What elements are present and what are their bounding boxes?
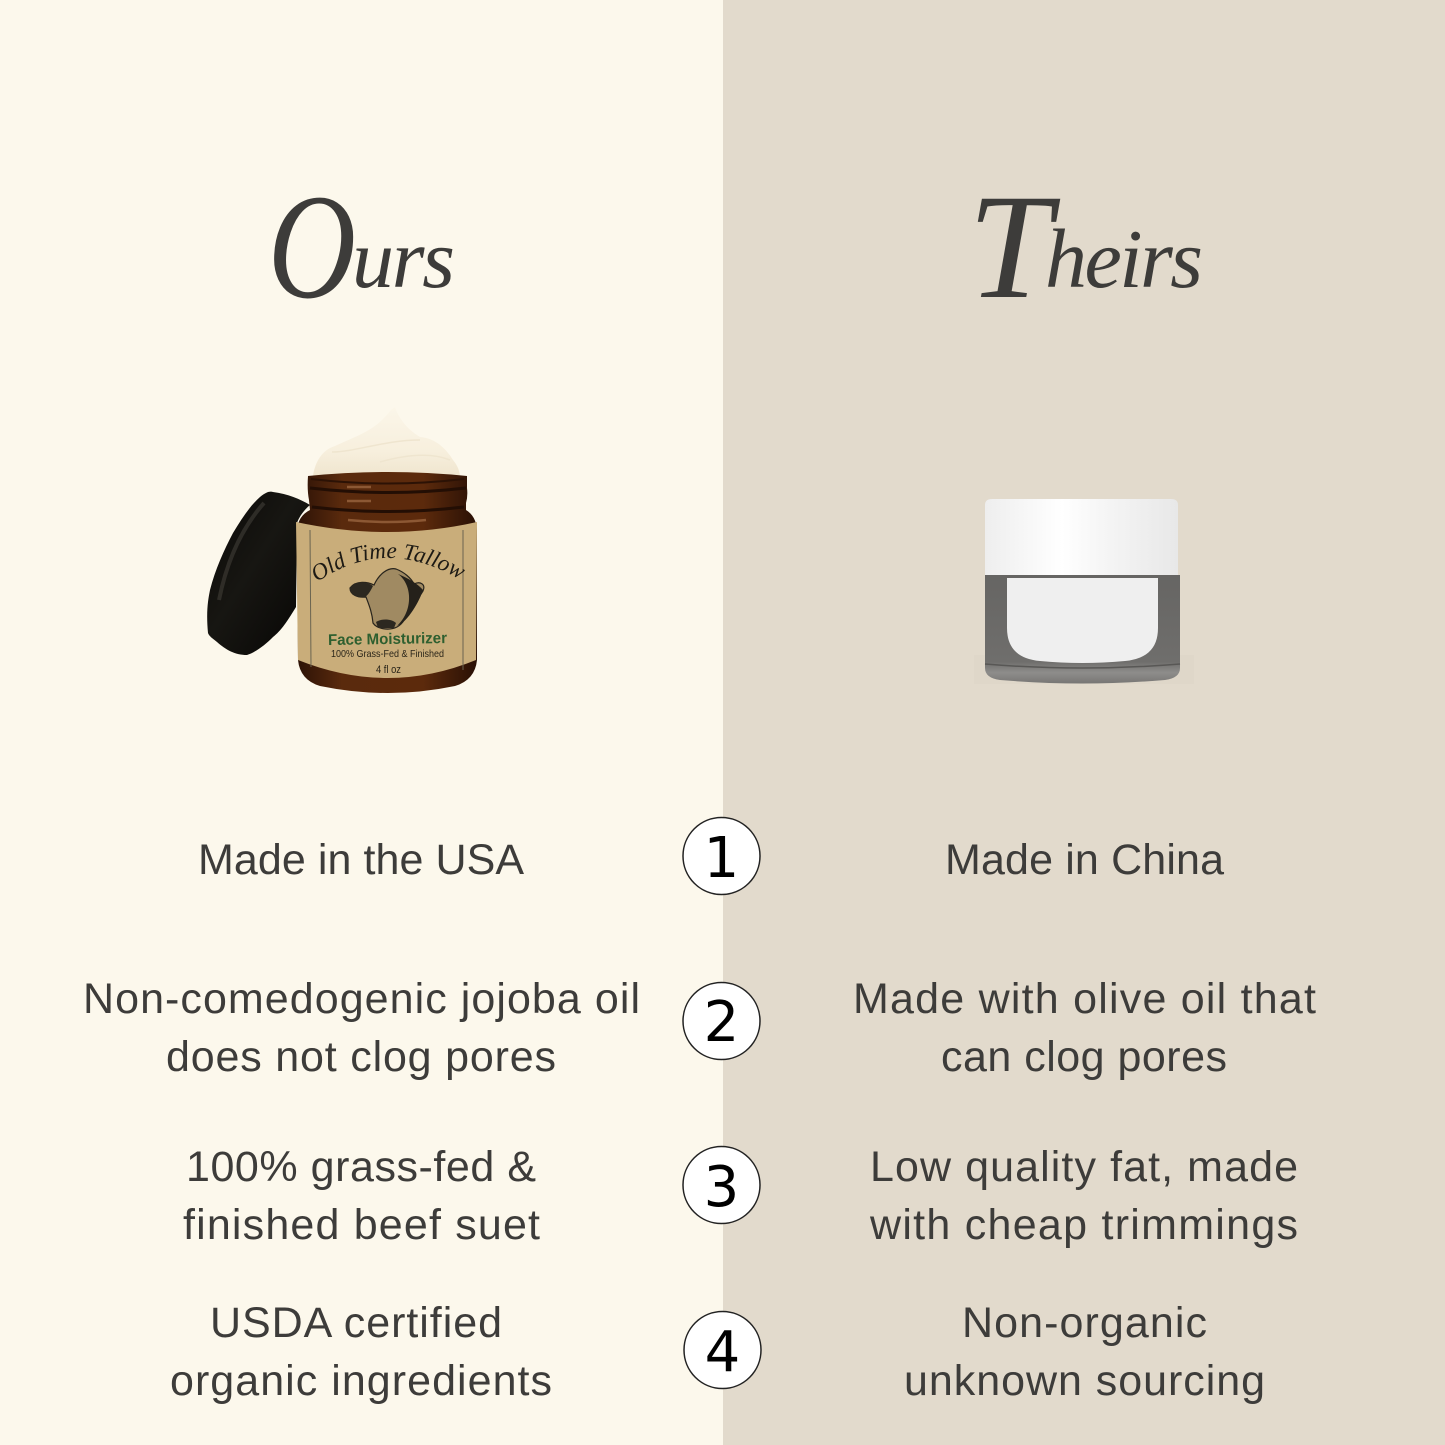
heading: Theirs: T <box>968 164 1061 330</box>
point 2: ours: Non-comedogenic jojoba oil <box>83 975 640 1023</box>
heading: Ours: O <box>268 164 356 330</box>
heading: Theirs <box>968 164 1203 330</box>
point 2: theirs <box>853 975 1316 1081</box>
point 1: ours: Made in the USA <box>198 836 524 884</box>
number badge 3: 3 <box>704 1155 739 1220</box>
point 4: theirs: unknown sourcing <box>904 1357 1265 1405</box>
amber glass jar <box>297 472 477 693</box>
point 3: theirs <box>869 1143 1298 1249</box>
point 2: theirs: Made with olive oil that <box>853 975 1316 1023</box>
point 4: theirs <box>904 1299 1265 1405</box>
product photo: amber tallow jar with open lid <box>207 426 477 693</box>
point 2: ours: does not clog pores <box>166 1033 556 1081</box>
glass base <box>985 575 1180 684</box>
product photo: generic white jar <box>974 499 1194 684</box>
white inner cup <box>1007 578 1158 663</box>
panel: theirs <box>723 0 1445 1445</box>
tagline: 100% Grass-Fed & Finished <box>331 648 444 660</box>
heading: Ours: urs <box>352 213 455 306</box>
point 4: ours: USDA certified <box>210 1299 502 1347</box>
product name: Face Moisturizer <box>328 630 447 649</box>
number badge 1 <box>683 818 760 894</box>
point 3: ours: finished beef suet <box>183 1201 540 1249</box>
point 3: theirs: Low quality fat, made <box>870 1143 1298 1191</box>
heading: Theirs: heirs <box>1045 213 1203 306</box>
kraft paper label <box>296 522 477 678</box>
panel: ours <box>83 164 640 1405</box>
number badge 3 <box>683 1146 760 1224</box>
number badge 2: 2 <box>704 990 739 1055</box>
icon: black jar lid <box>207 492 310 655</box>
size: 4 fl oz <box>376 664 401 676</box>
brand name: Old Time Tallow <box>313 544 465 580</box>
point 2: theirs: can clog pores <box>941 1033 1227 1081</box>
point 3: ours <box>183 1143 540 1249</box>
number badge 1: 1 <box>704 826 739 891</box>
number badge 2 <box>683 982 760 1060</box>
white lid <box>985 499 1178 575</box>
heading: Ours <box>268 164 455 330</box>
point 4: ours <box>170 1299 552 1405</box>
point 1: theirs: Made in China <box>945 836 1224 884</box>
point 2: ours <box>83 975 640 1081</box>
whipped cream <box>313 407 460 482</box>
point 4: theirs: Non-organic <box>962 1299 1207 1347</box>
number badge 4: 4 <box>705 1320 740 1385</box>
number badge 4 <box>684 1312 761 1388</box>
point 3: theirs: with cheap trimmings <box>869 1201 1298 1249</box>
icon: cow head <box>350 569 424 629</box>
point 4: ours: organic ingredients <box>170 1357 552 1405</box>
point 3: ours: 100% grass-fed & <box>186 1143 536 1191</box>
